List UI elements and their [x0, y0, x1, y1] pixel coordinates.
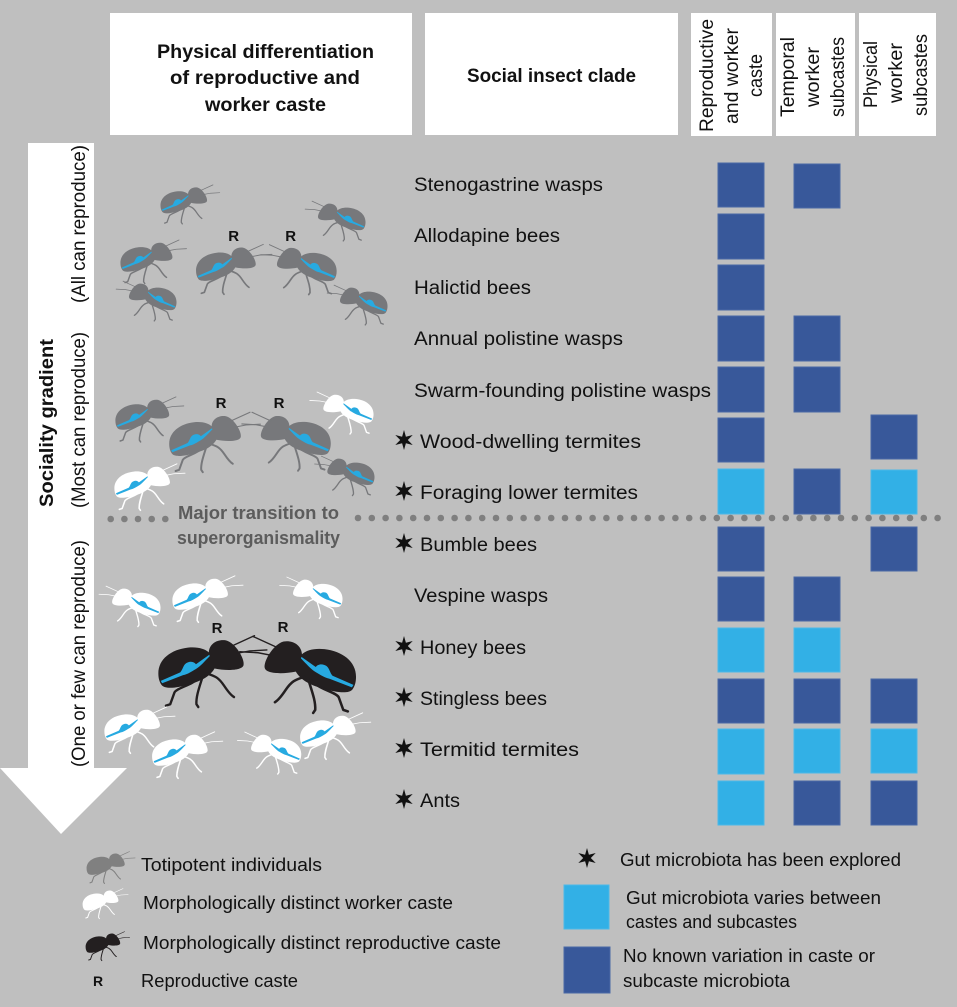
- matrix: reproductive and worker caste: [718, 163, 764, 825]
- header: temporal worker subcastes: worker: [803, 46, 824, 108]
- insect group: one or few can reproduce: R: [278, 619, 289, 636]
- label: major transition to superorganismality: superorganismality: [177, 528, 340, 548]
- matrix: physical worker subcastes: [871, 415, 917, 825]
- insect group: all can reproduce: [116, 185, 388, 325]
- header: temporal worker subcastes: [776, 13, 855, 136]
- clade list: Wood-dwelling termites: [420, 432, 641, 453]
- header: physical worker subcastes: worker: [886, 42, 907, 104]
- legend: castes: Morphologically distinct reproductive caste: [143, 933, 501, 953]
- legend: microbiota: Gut microbiota has been explored: [620, 850, 901, 870]
- legend: microbiota: Gut microbiota varies between: [626, 888, 881, 908]
- label: major transition to superorganismality: [177, 503, 340, 548]
- clade list: Bumble bees: [420, 535, 537, 556]
- insect group: most can reproduce: R: [274, 395, 285, 412]
- legend: microbiota: castes and subcastes: [626, 912, 797, 932]
- legend: castes: R: [93, 973, 103, 989]
- matrix: temporal worker subcastes: [794, 164, 840, 825]
- header: reproductive and worker caste: caste: [746, 54, 767, 97]
- arrow: sociality gradient: [0, 143, 127, 834]
- insect group: most can reproduce: R: [216, 395, 227, 412]
- legend: microbiota: subcaste microbiota: [623, 971, 791, 991]
- header: social insect clade: [425, 13, 678, 135]
- header: physical worker subcastes: Physical: [861, 41, 882, 108]
- legend: castes: Reproductive caste: [141, 971, 298, 991]
- header: reproductive and worker caste: and worker: [722, 27, 743, 124]
- label: major transition to superorganismality: Major transition to: [178, 503, 339, 523]
- stars: gut microbiota explored: [395, 430, 413, 809]
- arrow: sociality gradient: (Most can reproduce): [69, 332, 90, 508]
- clade list: Termitid termites: [420, 740, 579, 761]
- insect group: all can reproduce: R: [228, 228, 239, 245]
- header: physical differentiation: Physical differentiation: [157, 42, 374, 63]
- clade list: Swarm-founding polistine wasps: [414, 381, 711, 402]
- header: reproductive and worker caste: [691, 13, 772, 136]
- clade list: Foraging lower termites: [420, 483, 638, 504]
- clade list: Honey bees: [420, 638, 526, 659]
- header: temporal worker subcastes: subcastes: [828, 37, 849, 117]
- arrow: sociality gradient: Sociality gradient: [37, 338, 58, 507]
- legend: microbiota: No known variation in caste or: [623, 946, 875, 966]
- arrow: sociality gradient: (One or few can reproduce): [69, 540, 90, 767]
- clade list: Stingless bees: [420, 689, 547, 710]
- header: physical differentiation: [110, 13, 412, 135]
- legend: castes: Totipotent individuals: [141, 855, 322, 875]
- clade list: Halictid bees: [414, 278, 531, 299]
- header: physical worker subcastes: subcastes: [911, 34, 932, 116]
- clade list: [414, 175, 711, 812]
- insect group: one or few can reproduce: R: [212, 620, 223, 637]
- clade list: Allodapine bees: [414, 226, 560, 247]
- insect group: most can reproduce: [114, 392, 375, 510]
- clade list: Stenogastrine wasps: [414, 175, 603, 196]
- clade list: Vespine wasps: [414, 586, 548, 607]
- legend: castes: Morphologically distinct worker caste: [143, 893, 453, 913]
- legend: microbiota: [564, 848, 901, 993]
- header: physical differentiation: of reproductive and: [170, 68, 360, 89]
- header: social insect clade: Social insect clade: [467, 66, 636, 87]
- header: physical differentiation: worker caste: [204, 95, 326, 116]
- header: physical worker subcastes: [859, 13, 936, 136]
- insect group: one or few can reproduce: [99, 576, 371, 778]
- insect group: all can reproduce: R: [285, 228, 296, 245]
- clade list: Annual polistine wasps: [414, 329, 623, 350]
- header: temporal worker subcastes: Temporal: [778, 37, 799, 117]
- clade list: Ants: [420, 791, 460, 812]
- legend: castes: [83, 852, 501, 991]
- arrow: sociality gradient: (All can reproduce): [69, 145, 90, 303]
- header: reproductive and worker caste: Reproductive: [697, 19, 718, 132]
